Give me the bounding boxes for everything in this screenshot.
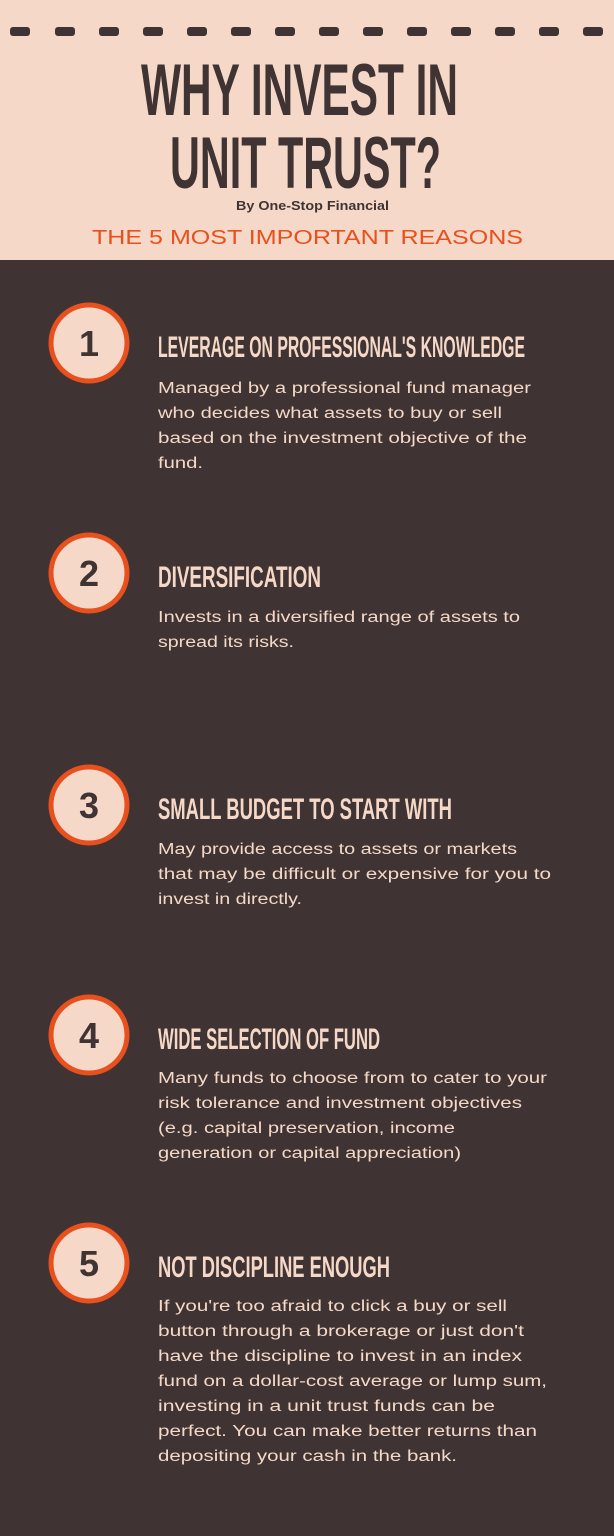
body 1: Managed by a professional fund manager xyxy=(158,380,531,397)
body 4: Many funds to choose from to cater to your xyxy=(158,1070,547,1087)
item 2 xyxy=(51,535,520,651)
body 5: fund on a dollar-cost average or lump sum, xyxy=(158,1373,547,1390)
body 5: If you're too afraid to click a buy or sell xyxy=(158,1298,507,1315)
item 1 xyxy=(51,305,531,472)
subtitle: THE 5 MOST IMPORTANT REASONS xyxy=(92,227,523,249)
body 5: depositing your cash in the bank. xyxy=(158,1448,457,1465)
heading 2: DIVERSIFICATION xyxy=(158,561,321,594)
item 5 xyxy=(51,1225,547,1465)
body 3: invest in directly. xyxy=(158,891,302,908)
icon: number 2: 2 xyxy=(79,553,99,594)
body 4: generation or capital appreciation) xyxy=(158,1145,461,1162)
body 2 xyxy=(158,609,520,651)
icon: number 5: 5 xyxy=(79,1243,99,1284)
icon: number 4 xyxy=(51,997,127,1073)
icon: number 1: 1 xyxy=(79,323,99,364)
body 5: investing in a unit trust funds can be xyxy=(158,1398,495,1415)
body 4: risk tolerance and investment objectives xyxy=(158,1095,522,1112)
body 4 xyxy=(158,1070,547,1162)
byline: By One-Stop Financial xyxy=(236,198,389,213)
body 3: that may be difficult or expensive for you to xyxy=(158,866,551,883)
item 4 xyxy=(51,997,547,1162)
icon: number 4: 4 xyxy=(79,1015,99,1056)
body 4: (e.g. capital preservation, income xyxy=(158,1120,455,1137)
body 2: Invests in a diversified range of assets to xyxy=(158,609,520,626)
heading 5: NOT DISCIPLINE ENOUGH xyxy=(158,1251,390,1284)
body 5 xyxy=(158,1298,547,1465)
icon: number 2 xyxy=(51,535,127,611)
body 5: have the discipline to invest in an index xyxy=(158,1348,522,1365)
header panel xyxy=(0,0,614,260)
icon: number 1 xyxy=(51,305,127,381)
body 3 xyxy=(158,841,551,908)
body 1: who decides what assets to buy or sell xyxy=(157,405,502,422)
icon: number 3 xyxy=(51,767,127,843)
body 3: May provide access to assets or markets xyxy=(158,841,517,858)
body 1: fund. xyxy=(158,455,203,472)
item 3 xyxy=(51,767,551,908)
body 5: perfect. You can make better returns than xyxy=(158,1423,537,1440)
body 1 xyxy=(157,380,531,472)
heading 4: WIDE SELECTION OF FUND xyxy=(158,1023,380,1056)
icon: number 5 xyxy=(51,1225,127,1301)
title xyxy=(141,50,458,204)
body 2: spread its risks. xyxy=(158,634,294,651)
body 5: button through a brokerage or just don't xyxy=(158,1323,525,1340)
body 1: based on the investment objective of the xyxy=(158,430,527,447)
icon: number 3: 3 xyxy=(79,785,99,826)
